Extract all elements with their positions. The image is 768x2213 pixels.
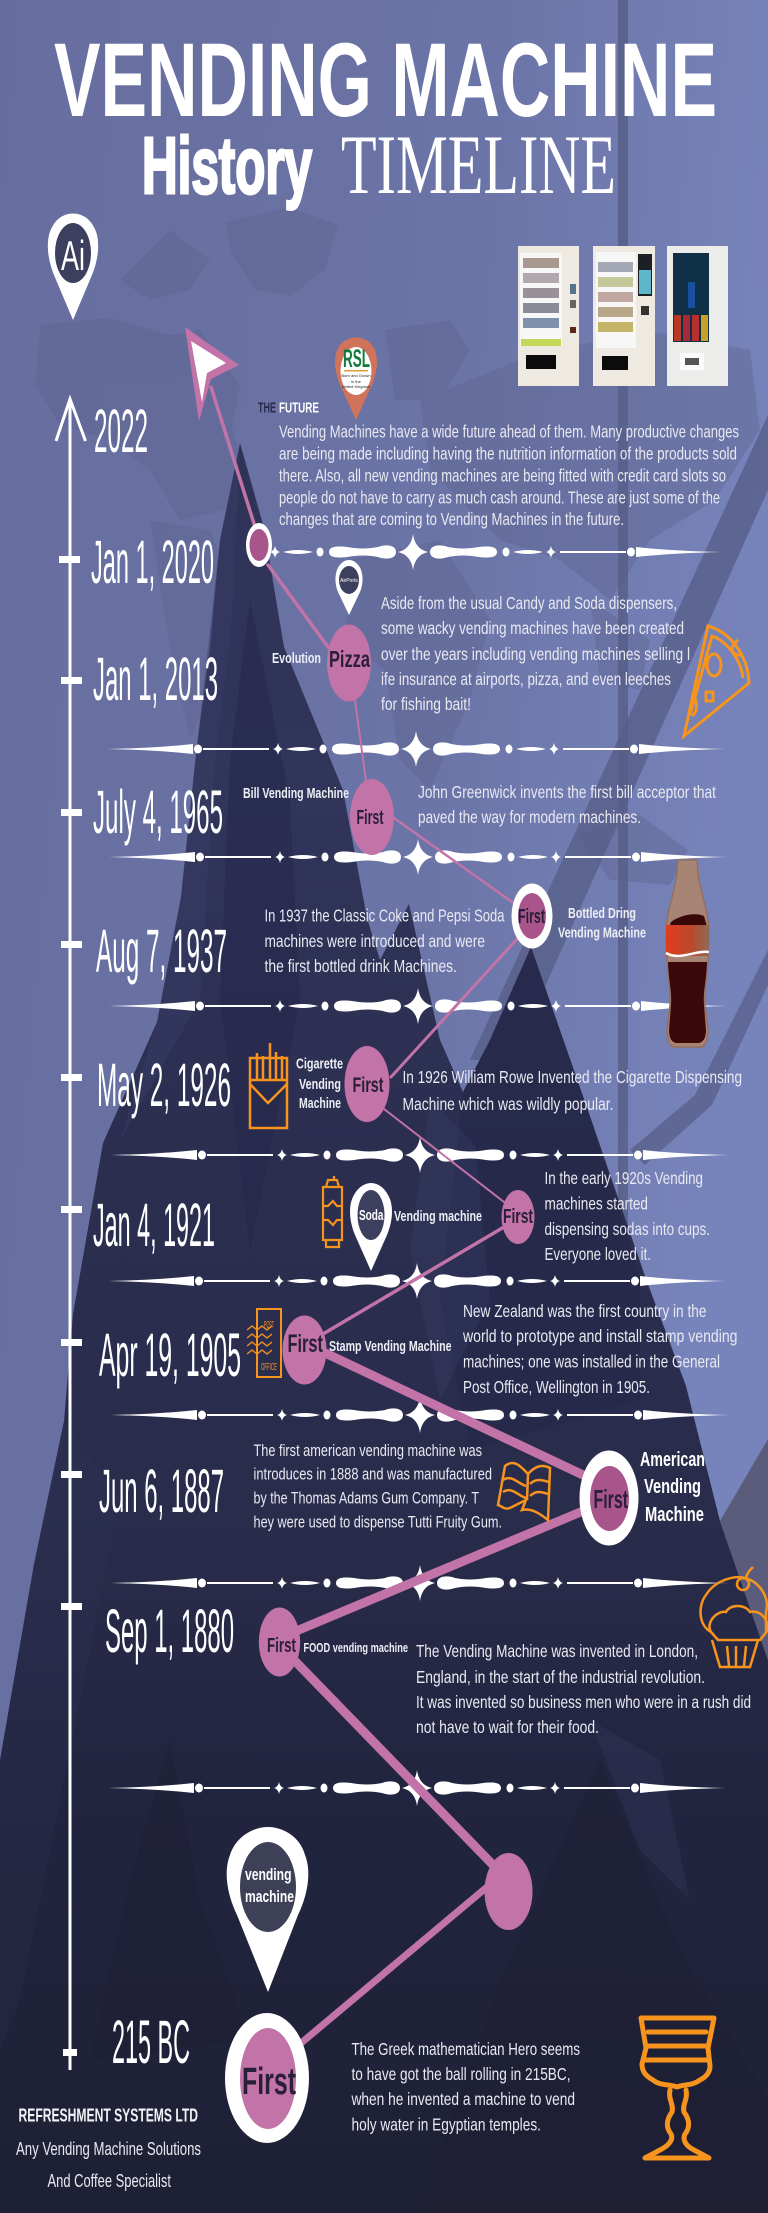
soda cups node: First <box>503 1206 533 1228</box>
cigarette node <box>344 1046 390 1122</box>
infographic canvas: Jan 1, 2013 <box>93 645 218 713</box>
date labels: 215 BC <box>112 2008 190 2076</box>
icon: gum wrapper <box>498 1463 550 1520</box>
infographic canvas: Jun 6, 1887 <box>99 1457 224 1525</box>
the future heading <box>258 400 319 416</box>
icon: cupcake <box>701 1567 768 1667</box>
diagonal light beams and vertical bar <box>470 0 768 1300</box>
ornamental dividers <box>104 534 729 1806</box>
bottled drink text: the first bottled drink Machines. <box>264 956 457 976</box>
icon: cigarette pack <box>250 1043 287 1128</box>
infographic canvas: Sep 1, 1880 <box>105 1597 234 1665</box>
evolution text <box>381 593 690 714</box>
bottled drink text: machines were introduced and were <box>264 931 485 951</box>
arrow cursor <box>185 327 239 421</box>
timeline axis <box>56 399 86 2070</box>
AirPorts pin <box>335 560 363 615</box>
RSL pin: RSL <box>343 345 370 373</box>
bill acceptor label: Bill Vending Machine <box>243 786 349 802</box>
215 BC text <box>351 2039 580 2134</box>
vending machine pin <box>227 1827 308 1992</box>
bill acceptor node <box>350 779 394 855</box>
bill acceptor text <box>418 782 716 827</box>
cigarette label: Cigarette <box>296 1056 343 1072</box>
cigarette label: Vending <box>299 1077 341 1093</box>
american text: introduces in 1888 and was manufactured <box>254 1466 492 1484</box>
icon: soda can <box>323 1176 342 1247</box>
date labels <box>91 397 241 2076</box>
american label: American <box>640 1449 705 1471</box>
pin: Ai: Ai <box>61 232 85 279</box>
bottled drink label: Vending Machine <box>558 926 646 942</box>
machine 2 <box>593 246 655 386</box>
infographic canvas: Jan 4, 1921 <box>93 1191 215 1259</box>
evolution label: Evolution <box>272 651 321 667</box>
stamp node <box>282 1316 326 1384</box>
timeline connector path <box>211 387 583 2049</box>
first vending machine node: First <box>242 2061 296 2103</box>
215 BC text: to have got the ball rolling in 215BC, <box>352 2064 570 2084</box>
food text: not have to wait for their food. <box>416 1717 599 1737</box>
american node: First <box>594 1484 628 1514</box>
stamp text: New Zealand was the first country in the <box>463 1301 706 1321</box>
bottled drink label: Bottled Dring <box>568 906 636 922</box>
cigarette text: Machine which was wildly popular. <box>402 1094 614 1114</box>
infographic canvas: Aug 7, 1937 <box>96 917 227 985</box>
bill acceptor text: paved the way for modern machines. <box>418 807 641 827</box>
215 BC text: when he invented a machine to vend <box>351 2089 575 2109</box>
vending machine pin: vending <box>245 1865 292 1884</box>
evolution node <box>327 624 371 702</box>
215 BC text: holy water in Egyptian temples. <box>352 2114 541 2134</box>
evolution text: Aside from the usual Candy and Soda dispensers, <box>381 593 677 613</box>
stamp label: Stamp Vending Machine <box>329 1339 452 1355</box>
date labels: 2022 <box>94 397 148 465</box>
icon: pizza <box>684 626 749 736</box>
american node <box>580 1450 638 1546</box>
the future node <box>246 523 272 567</box>
infographic canvas: May 2, 1926 <box>97 1051 231 1119</box>
cigarette label: Machine <box>299 1096 341 1112</box>
soda cups text: machines started <box>544 1194 648 1214</box>
stamp text <box>462 1301 738 1397</box>
bottled drink node <box>512 884 552 948</box>
cigarette node: First <box>352 1074 384 1097</box>
infographic canvas: July 4, 1965 <box>93 778 223 846</box>
food node <box>259 1608 300 1676</box>
RSL pin: United Kingdom <box>342 384 371 389</box>
first vending machine node <box>225 2013 309 2143</box>
evolution text: some wacky vending machines have been created <box>381 618 684 638</box>
american text: The first american vending machine was <box>254 1442 482 1460</box>
RSL pin <box>335 338 377 420</box>
the future text: changes that are coming to Vending Machines in the future. <box>279 509 624 529</box>
bottled drink label <box>558 906 646 942</box>
soda cups text: In the early 1920s Vending <box>544 1168 703 1188</box>
axis arrowhead <box>56 399 86 441</box>
bottled drink text <box>264 906 505 976</box>
plain node <box>484 1853 532 1930</box>
icon: post office stamp <box>247 1309 281 1377</box>
AirPorts pin: AirPorts <box>340 578 358 584</box>
footer: company: And Coffee Specialist <box>48 2171 171 2191</box>
the future heading: FUTURE <box>279 400 319 416</box>
soda pin <box>350 1183 392 1271</box>
american text: hey were used to dispense Tutti Fruity Gum. <box>254 1514 502 1532</box>
footer: company: Any Vending Machine Solutions <box>16 2139 201 2159</box>
cigarette text <box>402 1067 742 1114</box>
soda pin: Soda <box>359 1207 384 1224</box>
the future text <box>279 422 739 529</box>
infographic canvas: Jan 1, 2020 <box>91 528 214 596</box>
evolution text: for fishing bait! <box>381 694 471 714</box>
subtitle: TIMELINE: TIMELINE <box>341 118 616 212</box>
the future heading: THE <box>258 400 276 416</box>
icon: post office stamp: POST <box>264 1320 274 1331</box>
bottled drink node: First <box>518 906 545 928</box>
american text <box>254 1442 502 1532</box>
bill acceptor node: First <box>356 807 384 829</box>
american text: by the Thomas Adams Gum Company. T <box>254 1490 479 1508</box>
infographic canvas: Apr 19, 1905 <box>99 1321 241 1389</box>
machine 3 <box>667 246 728 386</box>
icon: chalice <box>641 2018 714 2158</box>
american label: Machine <box>645 1504 704 1526</box>
stamp text: Post Office, Wellington in 1905. <box>463 1377 650 1397</box>
icon: post office stamp: OFFICE <box>261 1362 277 1373</box>
soda cups node <box>502 1190 534 1244</box>
cigarette label <box>296 1056 343 1112</box>
RSL pin: Born and Grown <box>341 373 371 378</box>
215 BC text: The Greek mathematician Hero seems <box>352 2039 580 2059</box>
food node: First <box>267 1635 296 1657</box>
footer: company <box>16 2104 201 2191</box>
american label <box>640 1449 705 1526</box>
pin: Ai <box>48 214 98 320</box>
soda cups text: dispensing sodas into cups. <box>544 1219 710 1239</box>
stamp node: First <box>288 1330 323 1358</box>
mountain range <box>0 443 768 2213</box>
food label: FOOD vending machine <box>304 1640 408 1655</box>
soda cups text <box>544 1168 710 1264</box>
machine 1 <box>518 246 579 386</box>
bottled drink text: In 1937 the Classic Coke and Pepsi Soda <box>264 906 505 926</box>
food text <box>416 1641 751 1737</box>
american label: Vending <box>644 1476 701 1498</box>
subtitle: History: History <box>142 121 312 210</box>
evolution text: ife insurance at airports, pizza, and even leeches <box>381 669 671 689</box>
vending machine pin: machine <box>245 1887 294 1906</box>
footer: company: REFRESHMENT SYSTEMS LTD <box>18 2104 198 2126</box>
evolution node: Pizza <box>329 646 370 672</box>
RSL pin: in the <box>351 379 362 384</box>
icon: cola bottle <box>666 860 709 1047</box>
evolution text: over the years including vending machines selling l <box>381 644 690 664</box>
soda cups text: Everyone loved it. <box>544 1244 651 1264</box>
grey rock wedge right <box>720 1439 768 1660</box>
soda label: Vending machine <box>394 1209 482 1225</box>
axis ticks <box>59 556 82 2056</box>
vending machine photos <box>518 246 728 386</box>
world map silhouette <box>35 207 760 885</box>
